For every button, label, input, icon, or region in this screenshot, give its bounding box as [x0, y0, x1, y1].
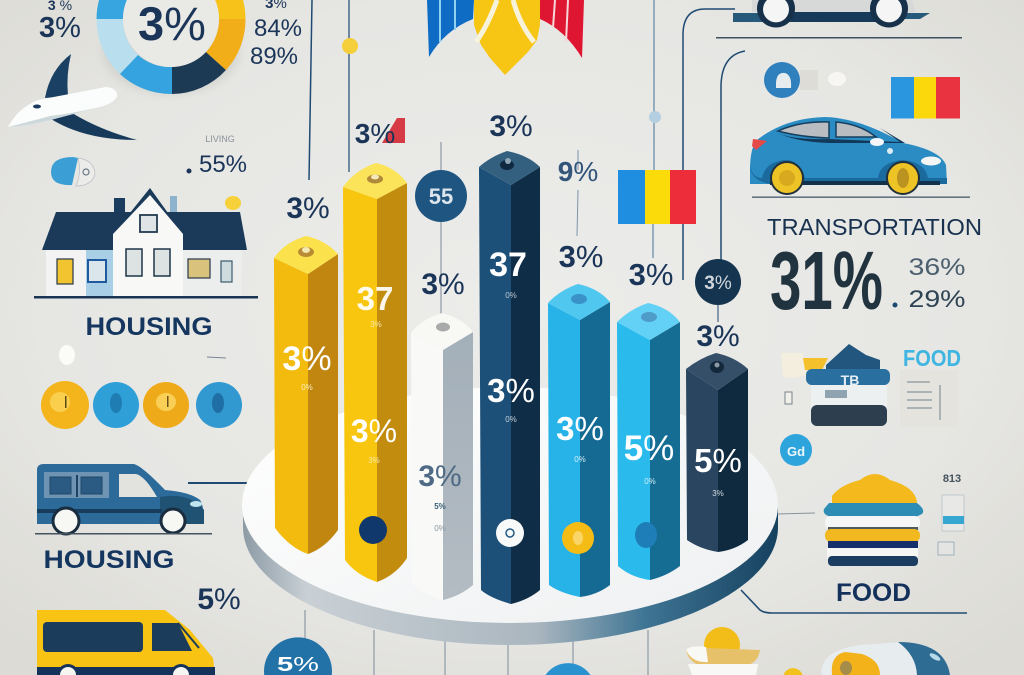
- bar 5: light blue: 0%: [574, 455, 586, 464]
- bar 2: yellow: [343, 163, 407, 582]
- badge: 55: 55: [429, 184, 453, 209]
- badge: 55: [415, 170, 467, 222]
- label: housing second: HOUSING: [44, 546, 174, 574]
- badge: 3% dark: 3%: [704, 273, 732, 294]
- bar 4: navy: 0%: [505, 291, 517, 300]
- bar 7: dark navy: 3%: [712, 489, 724, 498]
- bar 4 lower value: 3%: [487, 372, 535, 409]
- figure: five percent: 5%: [197, 583, 241, 616]
- bar 4: navy: [479, 151, 540, 604]
- small blue badge: [780, 434, 812, 466]
- food side notes: 813: [943, 473, 961, 485]
- label above bar 4: 3%: [489, 110, 533, 143]
- yellow van icon: [37, 610, 215, 675]
- donut side figures: 84%: [254, 15, 302, 42]
- bar 6 marker: [635, 522, 657, 548]
- food document icon: [900, 345, 961, 427]
- label: transportation: TRANSPORTATION: [767, 214, 982, 240]
- top ribbon emblem: [427, 0, 584, 75]
- food bowl icon: [686, 627, 760, 675]
- small blue badge: Gd: [787, 444, 805, 459]
- central flag: [618, 170, 696, 224]
- label above bar 7: 3%: [696, 320, 740, 353]
- flag icon group: [764, 62, 846, 98]
- bar 1: yellow: [274, 236, 338, 554]
- bottom blue circle: [546, 663, 590, 675]
- bar 4 upper value: 37: [489, 246, 527, 284]
- bar 6: light blue: [617, 303, 680, 580]
- living percentage: LIVING: [205, 134, 235, 144]
- headline figure: 31%: [770, 234, 883, 327]
- white dot: [59, 345, 75, 365]
- connector lines: [188, 0, 967, 675]
- dot on connector: [649, 111, 661, 123]
- bar 7: dark navy: [686, 353, 748, 552]
- label above bar 3: 3%: [421, 268, 465, 301]
- donut side figures: 3%: [39, 12, 81, 44]
- bar 1: yellow: 0%: [301, 383, 313, 392]
- airplane icon: [8, 54, 137, 140]
- side figures: [892, 254, 966, 313]
- house icon: [34, 188, 258, 298]
- bar 2: yellow: 3%: [368, 456, 380, 465]
- food side notes: [938, 473, 964, 555]
- bar 3: white: 5%: [434, 502, 446, 511]
- living percentage: 55%: [199, 151, 247, 178]
- bar 5: light blue: [548, 284, 610, 597]
- donut side figures: [39, 0, 302, 70]
- bar 5 marker: [562, 522, 594, 554]
- label: housing: HOUSING: [86, 313, 212, 341]
- yellow line dot: [342, 38, 358, 54]
- blue van icon: [35, 464, 212, 534]
- bottom circle: 5%: [264, 637, 332, 675]
- floating label: 9%: 9%: [558, 156, 598, 187]
- bar 3: white: [411, 313, 473, 600]
- top car partial: [716, 0, 962, 38]
- bar 6 value: 5%: [624, 429, 674, 468]
- donut side figures: 89%: [250, 43, 298, 70]
- blue car icon: [750, 117, 970, 198]
- bar 4 marker: [496, 519, 524, 547]
- side figures: 36%: [908, 254, 966, 281]
- bar 2: yellow: 3%: [370, 320, 382, 329]
- living percentage: [186, 134, 247, 178]
- food tray icon: [781, 344, 890, 426]
- food document icon: FOOD: [903, 345, 961, 371]
- platform disk: [242, 387, 778, 645]
- label above bar 1: 3%: [286, 192, 330, 225]
- donut chart: [96, 0, 246, 94]
- coin row: [41, 381, 242, 429]
- capsule icon: [821, 642, 950, 675]
- bar 2 upper value: 37: [357, 280, 393, 317]
- bar 4: navy: 0%: [505, 415, 517, 424]
- label: food: FOOD: [836, 579, 911, 607]
- label above bar 6: 3%: [629, 257, 673, 292]
- yellow dot: [784, 668, 802, 675]
- label above bar 5: 3%: [559, 239, 603, 274]
- bar 7 value: 5%: [694, 442, 742, 479]
- bar 2 marker: [359, 516, 387, 544]
- bar 2 lower value: 3%: [351, 413, 397, 449]
- bar 1 value: 3%: [282, 340, 332, 378]
- right flag: [891, 77, 960, 118]
- food stack icon: [824, 474, 923, 566]
- bar 3 value: 3%: [418, 460, 462, 493]
- bar 5 value: 3%: [556, 410, 604, 447]
- bar 3: white: 0%: [434, 524, 446, 533]
- bar 6: light blue: 0%: [644, 477, 656, 486]
- badge: 3% dark: [695, 259, 741, 305]
- small blue tag icon: [51, 157, 95, 186]
- label above bar 2 with flag tab: 3%: [355, 118, 395, 149]
- side figures: 29%: [908, 286, 966, 313]
- food tray icon: TB: [841, 372, 859, 388]
